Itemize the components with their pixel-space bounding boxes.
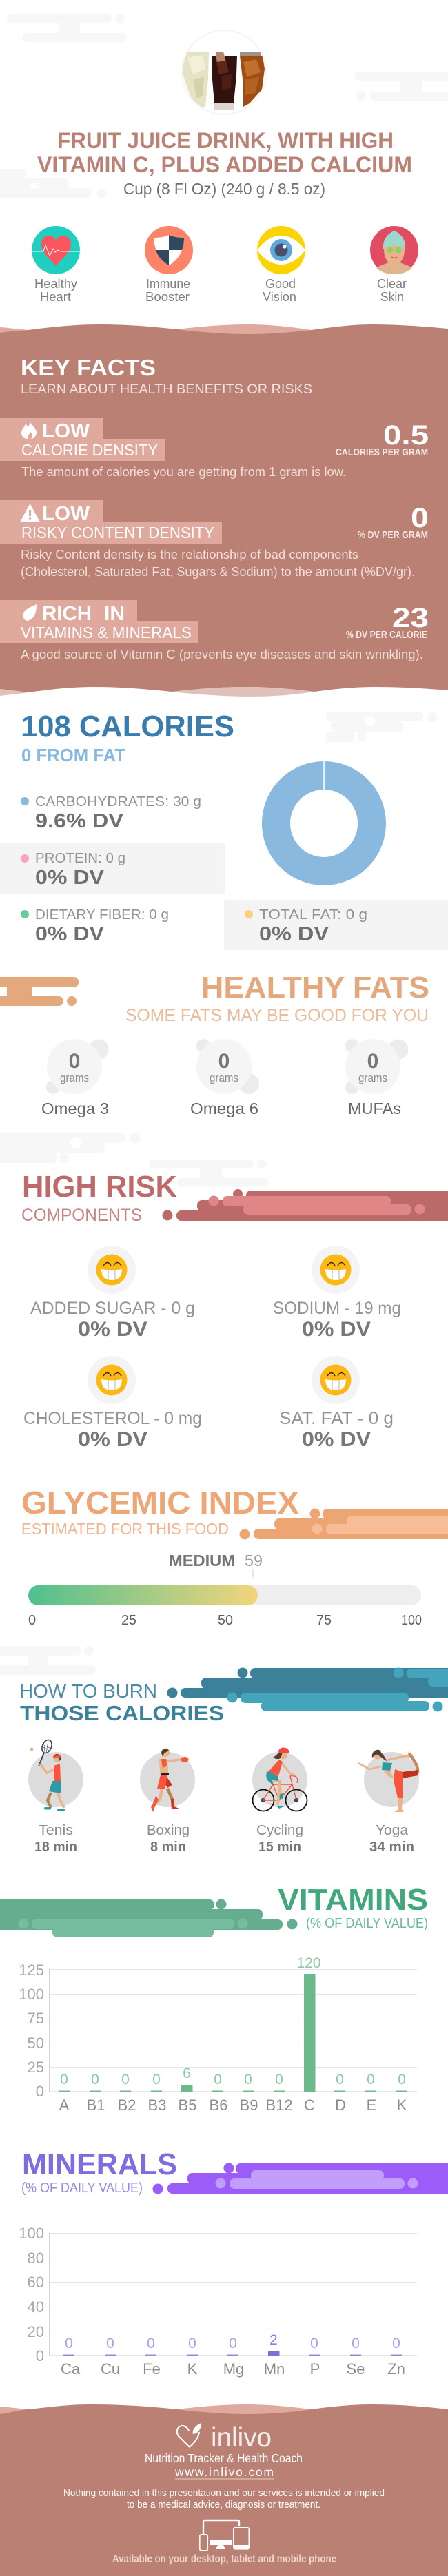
- benefit: clear skin: Skin: [380, 290, 404, 304]
- benefit: immune booster: [145, 226, 193, 304]
- bar chart: vitamins: 0: [60, 2072, 68, 2088]
- activity: cycling: Cycling: [256, 1823, 303, 1838]
- bar chart: minerals: 100: [19, 2225, 44, 2242]
- bar chart: vitamins: B9: [240, 2096, 258, 2114]
- nutrient: total fat: TOTAL FAT: 0 g: [259, 907, 367, 923]
- gauge scale: 25: [121, 1613, 136, 1628]
- bar chart: vitamins: 0: [398, 2072, 406, 2088]
- panel: minerals: [19, 2147, 448, 2378]
- ribbon: vitamins: [0, 1899, 298, 1937]
- bar chart: minerals: Mn: [264, 2360, 285, 2378]
- gauge scale: 75: [316, 1613, 332, 1628]
- nutrient: protein: 0% DV: [35, 867, 105, 889]
- component: saturated fat: 0% DV: [302, 1428, 371, 1451]
- nutrient: dietary fiber: 0% DV: [35, 923, 105, 945]
- subheading: (% OF DAILY VALUE): [306, 1915, 428, 1931]
- bar chart: minerals: 0: [310, 2336, 318, 2351]
- bar chart: vitamins: 125: [19, 1961, 44, 1979]
- fat: mufas: grams: [358, 1071, 387, 1084]
- nutrient: dietary fiber: DIETARY FIBER: 0 g: [35, 907, 169, 923]
- panel: glycemic index: [21, 1485, 448, 1628]
- fact: low risky content density: 0: [411, 503, 429, 533]
- activity: yoga: 34 min: [369, 1840, 414, 1855]
- bar chart: minerals: Ca: [61, 2360, 81, 2378]
- icon: eye: [257, 226, 305, 274]
- fact: low risky content density: LOW: [42, 503, 90, 525]
- fat: omega 3: [41, 1039, 109, 1117]
- icon: devices: [200, 2520, 249, 2551]
- fact: rich in vitamins and minerals: [0, 600, 429, 661]
- bar chart: vitamins: K: [397, 2096, 407, 2114]
- gauge scale: 0: [28, 1613, 36, 1628]
- heading: 108 calories: 108 CALORIES: [21, 710, 234, 743]
- subheading: components: COMPONENTS: [21, 1206, 142, 1225]
- benefit: immune booster: Immune: [146, 277, 190, 291]
- bar chart: minerals: Cu: [101, 2360, 120, 2378]
- panel: calories: [0, 710, 448, 950]
- gauge bar: [28, 1585, 421, 1605]
- logo: inlivo: [177, 2423, 272, 2453]
- gauge label: 59: [245, 1552, 263, 1569]
- activity: tennis: [28, 1738, 83, 1855]
- benefit: healthy heart: Healthy: [34, 277, 77, 291]
- bar chart: vitamins: 75: [28, 2010, 44, 2027]
- bar chart: minerals: 0: [106, 2336, 114, 2351]
- nutrient: dietary fiber: [21, 907, 169, 945]
- bar chart: minerals: 40: [28, 2298, 44, 2316]
- heading: glycemic index: GLYCEMIC INDEX: [21, 1485, 299, 1521]
- fat: omega 6: grams: [210, 1071, 238, 1084]
- component: saturated fat: [279, 1356, 394, 1451]
- food photo: three glasses of juice: [181, 30, 267, 115]
- icon: warning triangle: [21, 504, 39, 522]
- gauge label: [169, 1552, 263, 1577]
- ribbon: healthy fats: [0, 977, 79, 1006]
- heading: HOW TO BURN: [19, 1680, 157, 1702]
- bar chart: minerals: 0: [36, 2347, 44, 2364]
- footer panel: [0, 2404, 448, 2576]
- fact: rich in vitamins and minerals: A good source of Vitamin C (prevents eye diseases and skin wrinkling).: [21, 648, 423, 661]
- title: VITAMIN C, PLUS ADDED CALCIUM: [37, 152, 412, 177]
- ribbon: burn: [167, 1667, 448, 1711]
- fat: omega 3: grams: [60, 1071, 89, 1084]
- fat: omega 6: 0: [218, 1050, 230, 1073]
- icon: cyclist: [252, 1747, 307, 1811]
- bar chart: minerals: Zn: [387, 2360, 405, 2378]
- heading: key facts: [21, 356, 312, 397]
- fact: low risky content density: (Cholesterol, Saturated Fat, Sugars & Sodium) to the amount (%DV/gr).: [21, 565, 415, 579]
- bar chart: minerals: 0: [229, 2336, 237, 2351]
- subheading: (% OF DAILY VALUE): [21, 2180, 143, 2196]
- title: [37, 128, 412, 177]
- activity: tennis: 18 min: [34, 1840, 77, 1855]
- fat: omega 3: Omega 3: [41, 1100, 109, 1117]
- fact: rich in vitamins and minerals: % DV PER CALORIE: [346, 630, 427, 641]
- bar chart: vitamins: D: [335, 2096, 346, 2114]
- bar chart: vitamins: E: [367, 2096, 376, 2114]
- bar chart: vitamins: 25: [28, 2059, 44, 2076]
- bar chart: vitamins: 0: [121, 2072, 130, 2088]
- bar chart: minerals: P: [310, 2360, 320, 2378]
- bar chart: vitamins: 0: [367, 2072, 375, 2088]
- component: added sugar: ADDED SUGAR - 0 g: [30, 1299, 195, 1318]
- bar chart: minerals: 20: [28, 2323, 44, 2340]
- benefit: good vision: [257, 226, 305, 304]
- heading: [19, 1680, 224, 1725]
- panel: vitamins: [0, 1883, 428, 2114]
- bar chart: minerals: Mg: [223, 2360, 244, 2378]
- component: sodium: [273, 1246, 401, 1341]
- fact: rich in vitamins and minerals: 23: [392, 603, 429, 633]
- benefit: healthy heart: [32, 226, 80, 304]
- icon: grinning face: [96, 1254, 127, 1286]
- bar chart: vitamins: B3: [148, 2096, 166, 2114]
- bar chart: vitamins: 100: [19, 1986, 44, 2003]
- disclaimer: Nothing contained in this presentation and our services is intended or implied: [63, 2487, 385, 2499]
- bar chart: vitamins: 0: [244, 2072, 252, 2088]
- donut chart: [276, 761, 372, 871]
- panel: healthy fats: [0, 971, 429, 1117]
- bar chart: vitamins: 120: [296, 1955, 321, 1971]
- bar chart: vitamins: B12: [265, 2096, 293, 2114]
- activity: boxing: 8 min: [150, 1840, 186, 1855]
- bar chart: vitamins: 0: [275, 2072, 283, 2088]
- icon: tennis player: [30, 1738, 65, 1811]
- gauge label: MEDIUM: [169, 1552, 235, 1569]
- bar chart: minerals: Se: [347, 2360, 365, 2378]
- bar chart: minerals: 0: [65, 2336, 73, 2351]
- nutrient: total fat: 0% DV: [259, 923, 329, 945]
- heading: THOSE CALORIES: [20, 1701, 224, 1725]
- benefit: clear skin: [370, 226, 418, 304]
- bar chart: minerals: K: [187, 2360, 198, 2378]
- bar chart: minerals: 0: [188, 2336, 196, 2351]
- benefit: good vision: Good: [265, 277, 296, 291]
- fact: low calorie density: [0, 418, 429, 479]
- disclaimer: [63, 2487, 385, 2511]
- heading: minerals: MINERALS: [22, 2147, 177, 2181]
- activity: tennis: Tenis: [39, 1823, 73, 1838]
- fact: rich in vitamins and minerals: RICH: [42, 603, 92, 625]
- ribbon: minerals: [153, 2163, 448, 2194]
- heading: high risk: HIGH RISK: [22, 1170, 177, 1204]
- fat: omega 6: [190, 1039, 259, 1117]
- component: sodium: 0% DV: [302, 1318, 371, 1341]
- fat: omega 3: 0: [69, 1050, 80, 1073]
- bar chart: vitamins: 6: [183, 2065, 191, 2081]
- component: sodium: SODIUM - 19 mg: [273, 1299, 401, 1318]
- nutrient: total fat: [224, 900, 448, 950]
- icon: flame: [21, 421, 37, 439]
- serving size: Cup (8 Fl Oz) (240 g / 8.5 oz): [123, 180, 325, 198]
- component: saturated fat: SAT. FAT - 0 g: [279, 1409, 394, 1428]
- nutrient: protein: PROTEIN: 0 g: [35, 851, 125, 866]
- fact: low risky content density: % DV PER GRAM: [358, 530, 428, 541]
- bar chart: minerals: 80: [28, 2249, 44, 2267]
- icon: grinning face: [96, 1364, 127, 1396]
- component: added sugar: 0% DV: [78, 1318, 147, 1341]
- icon: boxer: [151, 1749, 189, 1812]
- activity: cycling: [252, 1747, 307, 1855]
- component: added sugar: [30, 1246, 195, 1341]
- fact: low risky content density: Risky Content density is the relationship of bad components: [21, 548, 358, 561]
- subheading: ESTIMATED FOR THIS FOOD: [21, 1520, 229, 1538]
- activity: boxing: [140, 1749, 195, 1855]
- disclaimer: to be a medical advice, diagnosis or treatment.: [127, 2499, 320, 2511]
- subheading: SOME FATS MAY BE GOOD FOR YOU: [125, 1006, 429, 1025]
- fat: mufas: [345, 1039, 408, 1117]
- nutrient: carbohydrates: [21, 794, 201, 832]
- icon: leaf: [23, 604, 37, 621]
- title: FRUIT JUICE DRINK, WITH HIGH: [57, 128, 394, 153]
- bar chart: vitamins: 50: [28, 2034, 44, 2052]
- bar chart: vitamins: 0: [36, 2083, 44, 2100]
- heading: healthy fats: HEALTHY FATS: [201, 971, 429, 1004]
- component: cholesterol: 0% DV: [78, 1428, 147, 1451]
- icon: heart: [32, 226, 80, 274]
- fact: low calorie density: LOW: [42, 420, 90, 442]
- heading: key facts: KEY FACTS: [21, 356, 156, 381]
- benefit: good vision: Vision: [263, 290, 296, 304]
- heading: vitamins: VITAMINS: [278, 1883, 428, 1917]
- panel: key facts: [0, 324, 448, 697]
- tagline: Nutrition Tracker & Health Coach: [145, 2451, 303, 2465]
- bar chart: minerals: 2: [269, 2332, 278, 2348]
- activity: cycling: 15 min: [258, 1840, 301, 1855]
- bar chart: minerals: 0: [147, 2336, 155, 2351]
- fact: rich in vitamins and minerals: VITAMINS & MINERALS: [21, 624, 192, 641]
- bar chart: vitamins: 0: [214, 2072, 222, 2088]
- bar chart: vitamins: [19, 1955, 417, 2114]
- benefit: immune booster: Booster: [145, 290, 190, 304]
- gauge scale: [28, 1613, 422, 1628]
- benefit: healthy heart: Heart: [40, 290, 71, 304]
- component: cholesterol: [23, 1356, 202, 1451]
- bar chart: vitamins: B6: [210, 2096, 227, 2114]
- icon: grinning face: [320, 1364, 352, 1396]
- bar chart: vitamins: 0: [152, 2072, 161, 2088]
- fat: mufas: 0: [367, 1050, 378, 1073]
- gauge scale: 100: [401, 1613, 422, 1628]
- availability note: Available on your desktop, tablet and mobile phone: [112, 2553, 336, 2565]
- fact: low risky content density: [0, 500, 429, 579]
- bar chart: vitamins: B2: [118, 2096, 136, 2114]
- icon: grinning face: [320, 1254, 352, 1286]
- activity: boxing: Boxing: [147, 1823, 190, 1838]
- bar chart: minerals: [19, 2225, 417, 2378]
- fact: low calorie density: CALORIE DENSITY: [21, 441, 158, 459]
- ribbon: high risk: [163, 1189, 448, 1221]
- bar chart: vitamins: 0: [91, 2072, 99, 2088]
- icon: face with towel: [370, 226, 418, 274]
- nutrient: carbohydrates: 9.6% DV: [35, 810, 124, 832]
- icon: shield: [145, 226, 193, 274]
- heading: key facts: LEARN ABOUT HEALTH BENEFITS OR RISKS: [21, 382, 312, 397]
- bar chart: vitamins: 0: [336, 2072, 344, 2088]
- bar chart: minerals: 60: [28, 2274, 44, 2291]
- fat: mufas: MUFAs: [348, 1100, 401, 1117]
- logo: inlivo: inlivo: [211, 2423, 272, 2453]
- bar chart: minerals: 0: [352, 2336, 360, 2351]
- activity: yoga: Yoga: [376, 1823, 409, 1838]
- fact: low calorie density: 0.5: [383, 420, 429, 451]
- bar chart: minerals: Fe: [143, 2360, 161, 2378]
- bar chart: vitamins: B5: [179, 2096, 196, 2114]
- website link: www.inlivo.com: [174, 2465, 274, 2479]
- fact: rich in vitamins and minerals: IN: [104, 603, 125, 625]
- bar chart: vitamins: A: [59, 2096, 70, 2114]
- bar chart: vitamins: B1: [87, 2096, 105, 2114]
- benefit: clear skin: Clear: [377, 277, 407, 291]
- gauge scale: 50: [218, 1613, 233, 1628]
- panel: how to burn those calories: [19, 1667, 448, 1855]
- panel: high risk components: [21, 1170, 448, 1451]
- subheading: from fat: 0 FROM FAT: [21, 745, 125, 765]
- component: cholesterol: CHOLESTEROL - 0 mg: [23, 1409, 202, 1428]
- nutrient: carbohydrates: CARBOHYDRATES: 30 g: [35, 794, 201, 810]
- nutrient: protein: [0, 843, 225, 894]
- activity: yoga: [358, 1750, 419, 1855]
- icon: yoga pose: [358, 1750, 418, 1812]
- fact: low calorie density: CALORIES PER GRAM: [336, 447, 428, 458]
- fact: low risky content density: RISKY CONTENT DENSITY: [21, 524, 214, 542]
- bar chart: vitamins: C: [304, 2096, 315, 2114]
- fact: low calorie density: The amount of calories you are getting from 1 gram is low.: [21, 465, 346, 479]
- bar chart: minerals: 0: [392, 2336, 400, 2351]
- ribbon: glycemic index: [240, 1509, 448, 1539]
- fat: omega 6: Omega 6: [190, 1100, 258, 1117]
